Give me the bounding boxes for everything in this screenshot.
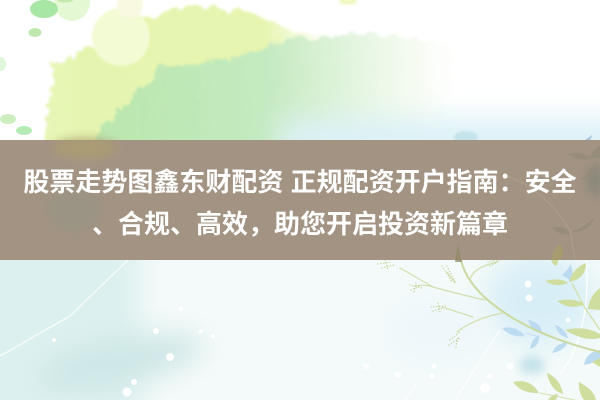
faded plants in the band — [455, 146, 600, 262]
green dots top left — [0, 0, 90, 135]
blue leaves — [502, 264, 600, 365]
bottom wash — [0, 240, 600, 400]
pale circles in the splash — [92, 0, 150, 66]
band tinting from the artwork beneath — [47, 138, 600, 232]
headline line 1: 股票走势图鑫东财配资 正规配资开户指南：安全 — [23, 167, 577, 197]
pale blue wash above the band — [280, 0, 600, 168]
white streak and sparkles bottom left — [0, 260, 215, 396]
green branch with seed sprays — [400, 260, 600, 352]
yellow-green watercolor splash — [42, 6, 340, 150]
white streaks and sparkles bottom right — [363, 260, 587, 400]
green leaves right — [513, 250, 600, 400]
seed clusters — [378, 258, 505, 347]
green textured wash — [80, 33, 480, 150]
headline — [23, 167, 577, 239]
headline line 2: 、合规、高效，助您开启投资新篇章 — [92, 209, 508, 239]
translucent band — [0, 140, 600, 260]
